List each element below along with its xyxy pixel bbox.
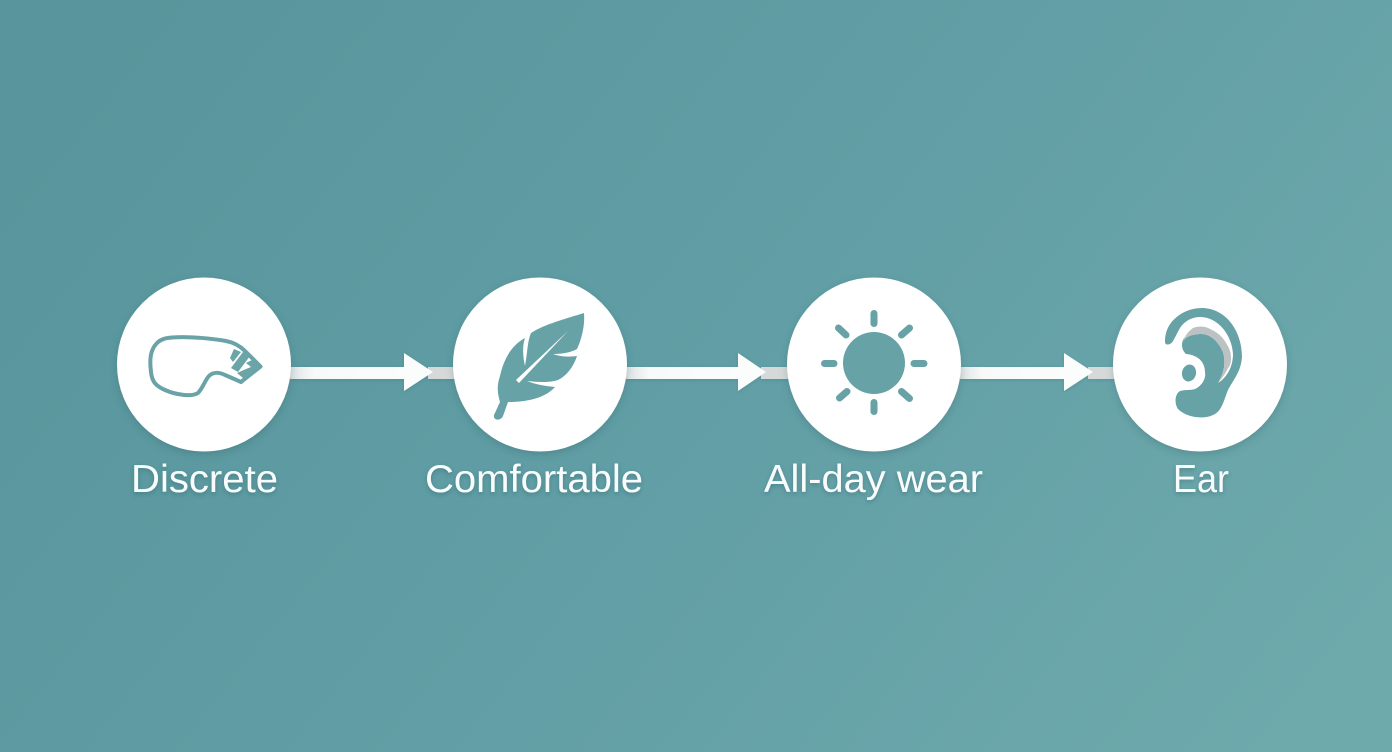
circle: ear	[1113, 278, 1287, 452]
label: discrete: Discrete	[131, 458, 278, 501]
step: all-day wear	[764, 278, 983, 501]
circle: discrete	[117, 278, 291, 452]
label: comfortable: Comfortable	[425, 458, 643, 501]
circle: all-day wear	[787, 278, 961, 452]
icon: ear	[1165, 308, 1242, 417]
step: discrete	[117, 278, 291, 501]
label: all-day wear: All-day wear	[764, 458, 983, 501]
step: ear	[1113, 278, 1287, 501]
icon: goggles	[150, 337, 260, 395]
ear canal	[1180, 363, 1198, 383]
arrow: all-day wear to ear	[960, 353, 1116, 391]
label: ear: Ear	[1173, 458, 1229, 501]
circle: comfortable	[453, 278, 627, 452]
arrow: comfortable to all-day wear	[626, 353, 789, 391]
icon: sun	[824, 314, 924, 412]
icon: leaf	[494, 313, 584, 420]
step: comfortable	[425, 278, 643, 501]
arrow: discrete to comfortable	[290, 353, 456, 391]
